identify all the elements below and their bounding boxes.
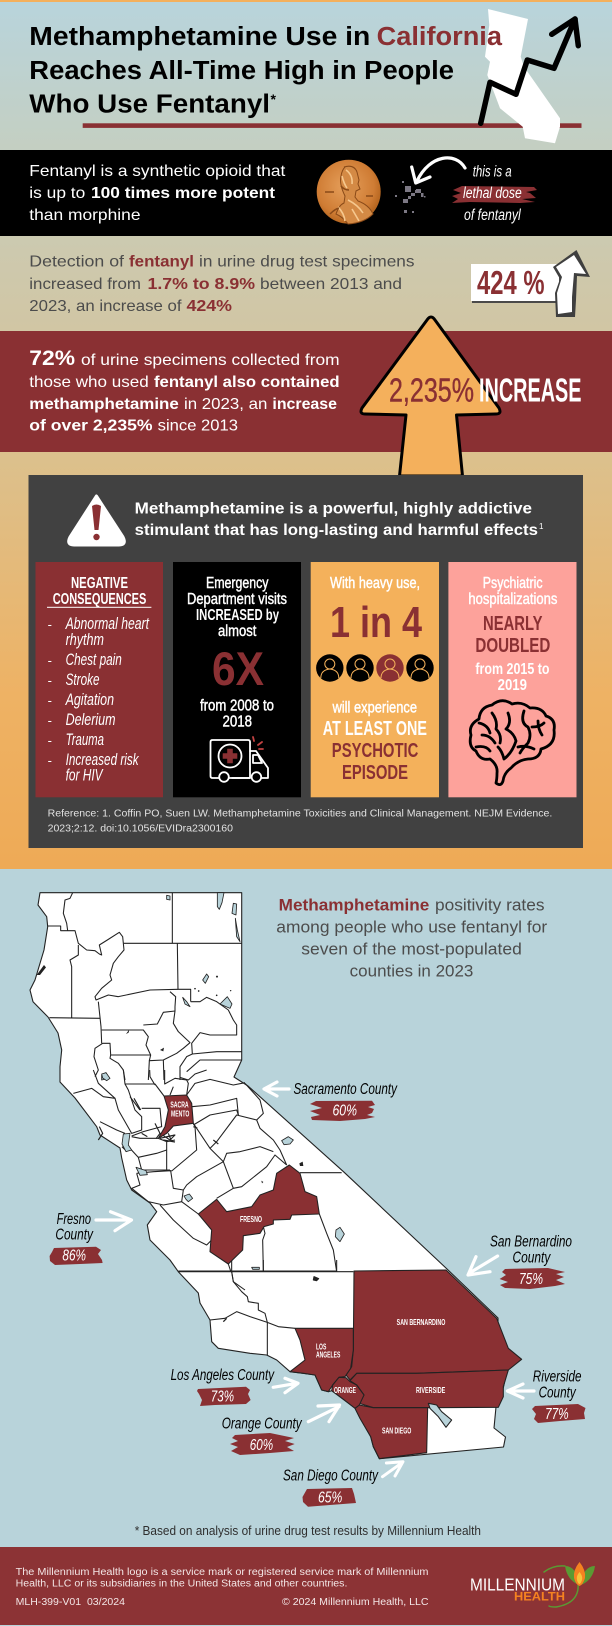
small lakes and ponds: north <box>37 965 231 1051</box>
icon row: four people, one highlighted <box>316 654 434 682</box>
map section background <box>0 869 612 1549</box>
text: co-use statistic: those who used <box>29 374 149 391</box>
card: psychotic episode <box>311 562 439 797</box>
list: consequences: for HIV <box>66 767 104 785</box>
callout: Riverside County 77%: Riverside <box>533 1369 582 1386</box>
title: Methamphetamine Use in <box>29 23 370 51</box>
icon: brain <box>470 701 554 785</box>
list: consequences: - <box>48 693 52 708</box>
callout: lethal dose label: of fentanyl <box>464 207 521 224</box>
callout: lethal dose label: lethal dose <box>463 185 522 202</box>
callout: San Diego County 65%: 65% <box>318 1490 342 1507</box>
text: fentanyl detection statistic: Detection of <box>29 254 125 271</box>
delta and bay waterways <box>98 1098 218 1150</box>
icon: penny <box>317 160 381 224</box>
footer legal text <box>16 1567 428 1608</box>
panel heading: stimulant that has long-lasting and harmful effects <box>135 522 538 539</box>
callout: Sacramento County 60%: Sacramento County <box>294 1081 398 1098</box>
callout: lethal dose label <box>452 164 537 224</box>
title <box>29 23 503 119</box>
list: consequences: - <box>48 753 52 768</box>
county: Sacramento <box>158 1095 193 1138</box>
callout: 424% badge with arrow: 424 % <box>477 264 544 301</box>
panel heading <box>135 500 544 539</box>
county labels: RIVERSIDE <box>416 1385 445 1395</box>
reference note <box>48 808 552 835</box>
list: consequences: Delerium <box>66 711 116 729</box>
text: fentanyl detection statistic: between 2013 and <box>260 276 402 293</box>
card: emergency department visits <box>173 562 301 797</box>
county labels: LOS <box>316 1342 326 1352</box>
card: psychiatric hospitalizations: from 2015 to <box>475 661 550 678</box>
panel: methamphetamine harms <box>28 475 583 848</box>
county lines: central <box>73 1070 344 1290</box>
county labels: ORANGE <box>334 1385 356 1395</box>
footer <box>0 1547 612 1625</box>
callout: Fresno County 86%: 86% <box>62 1248 86 1265</box>
card: emergency department visits: Emergency <box>206 575 269 592</box>
card: psychiatric hospitalizations: hospitalizations <box>468 591 558 608</box>
text: fentanyl detection statistic: in urine drug test specimens <box>199 254 414 271</box>
text: co-use statistic: in 2023, an <box>184 396 267 413</box>
text: co-use statistic: methamphetamine <box>29 396 179 413</box>
card: psychiatric hospitalizations: NEARLY <box>483 613 543 635</box>
icon: rising black arrow <box>481 19 578 123</box>
callout: San Bernardino County 75%: 75% <box>519 1271 543 1288</box>
county: San Diego <box>355 1405 428 1459</box>
county: Fresno: SACRA <box>170 1099 189 1109</box>
footer legal text: The Millennium Health logo is a service mark or registered service mark of Millennium <box>16 1567 428 1578</box>
card: emergency department visits: from 2008 to <box>200 698 274 715</box>
icon: warning triangle <box>69 496 124 545</box>
card: psychiatric hospitalizations: 2019 <box>498 677 527 694</box>
text: fentanyl potency statement <box>29 163 286 224</box>
callout: Sacramento County 60% <box>264 1081 398 1121</box>
county: Riverside <box>350 1370 508 1408</box>
arrow: large 2,235% increase arrow <box>361 317 582 476</box>
list: consequences: Trauma <box>66 731 104 749</box>
text: co-use statistic: of urine specimens collected from <box>81 352 340 369</box>
top accent strip <box>0 0 612 2</box>
reference note: 2023;2:12. doi:10.1056/EVIDra2300160 <box>48 823 233 835</box>
list: consequences: - <box>48 733 52 748</box>
county: Fresno: FRESNO <box>240 1214 262 1224</box>
panel heading: 1 <box>539 522 544 531</box>
text: fentanyl potency statement: 100 times more potent <box>91 185 276 202</box>
card: emergency department visits: Department visits <box>187 591 287 608</box>
callout: Riverside County 77%: 77% <box>545 1406 569 1423</box>
text: map heading: positivity rates <box>435 897 544 915</box>
list: consequences: Agitation <box>65 691 114 709</box>
callout: San Diego County 65%: San Diego County <box>283 1468 379 1485</box>
card: psychiatric hospitalizations <box>448 562 576 797</box>
callout: Fresno County 86% <box>50 1211 132 1265</box>
list: consequences: - <box>48 653 52 668</box>
county: Fresno <box>158 1095 319 1264</box>
callout: Orange County 60%: Orange County <box>222 1415 303 1432</box>
header graphic: California with rising arrow <box>83 9 581 143</box>
list: consequences: - <box>48 713 52 728</box>
list: consequences: Stroke <box>66 671 100 689</box>
card: negative consequences: CONSEQUENCES <box>53 591 147 608</box>
county: Los Angeles <box>290 1328 353 1392</box>
callout: Sacramento County 60%: 60% <box>332 1103 357 1120</box>
county: Orange <box>332 1377 364 1408</box>
footer legal text: Health, LLC or its subsidiaries in the United States and other countries. <box>16 1579 347 1590</box>
text: co-use statistic: fentanyl also contained <box>154 374 340 391</box>
callout: Riverside County 77% <box>507 1369 586 1423</box>
county lines: south <box>178 1260 353 1355</box>
text: fentanyl detection statistic <box>29 254 415 315</box>
card: psychotic episode: will experience <box>332 700 417 717</box>
icon: white California silhouette <box>485 9 560 143</box>
card: psychotic episode: With heavy use, <box>330 575 420 592</box>
county: Fresno: MENTO <box>171 1108 190 1118</box>
callout: San Diego County 65% <box>283 1462 403 1507</box>
title: Who Use Fentanyl <box>29 91 270 119</box>
panel heading: Methamphetamine is a powerful, highly addictive <box>135 500 532 517</box>
text: map heading: among people who use fentanyl for <box>276 919 548 937</box>
southern highlighted counties <box>290 1270 522 1459</box>
card: psychotic episode: PSYCHOTIC <box>332 740 418 762</box>
reference note: Reference: 1. Coffin PO, Suen LW. Methamphetamine Toxicities and Clinical Management. NEJM Evidence. <box>48 808 552 820</box>
arrow: large 2,235% increase arrow: 2,235% <box>389 372 474 409</box>
card: emergency department visits: INCREASED by <box>196 607 279 624</box>
card: negative consequences: NEGATIVE <box>71 575 128 592</box>
county labels <box>316 1317 445 1435</box>
callout: San Bernardino County 75%: San Bernardino <box>490 1234 572 1251</box>
text: fentanyl detection statistic: 424% <box>186 298 232 315</box>
card: emergency department visits: almost <box>218 623 257 640</box>
lake: Salton Sea <box>428 1403 452 1427</box>
text: co-use statistic: of over 2,235% <box>29 418 153 435</box>
title: California <box>377 23 503 51</box>
callout: 424% badge with arrow <box>471 250 590 317</box>
card: psychiatric hospitalizations: DOUBLED <box>475 635 550 657</box>
text: co-use statistic: since 2013 <box>158 418 238 435</box>
card: psychotic episode: AT LEAST ONE <box>323 718 427 740</box>
icon: lethal dose powder specks <box>395 181 426 213</box>
footer legal text: MLH-399-V01 03/2024 <box>16 1597 125 1608</box>
callout: San Bernardino County 75%: County <box>512 1250 551 1267</box>
text: map heading: seven of the most-populated <box>301 941 522 959</box>
text: co-use statistic <box>29 347 340 435</box>
text: co-use statistic: 72% <box>29 347 75 370</box>
list: consequences <box>48 615 150 785</box>
text: fentanyl detection statistic: increased from <box>29 276 141 293</box>
list: consequences: rhythm <box>66 631 104 649</box>
text: map heading: Methamphetamine <box>279 897 429 915</box>
county lines: north <box>37 893 242 1080</box>
county labels: SAN BERNARDINO <box>397 1317 445 1327</box>
small ponds: central <box>261 1162 303 1183</box>
text: fentanyl detection statistic: fentanyl <box>129 254 194 271</box>
footer legal text: © 2024 Millennium Health, LLC <box>282 1597 428 1608</box>
callout: Riverside County 77%: County <box>539 1384 577 1401</box>
county labels: ANGELES <box>316 1349 340 1359</box>
callout: Los Angeles County 73%: 73% <box>211 1389 234 1406</box>
footnote: * Based on analysis of urine drug test results by Millennium Health <box>135 1524 481 1538</box>
callout: Orange County 60% <box>222 1405 340 1455</box>
text: fentanyl potency statement: than morphine <box>29 207 141 224</box>
title: Reaches All-Time High in People <box>29 57 454 85</box>
text: fentanyl potency statement: is up to <box>29 185 85 202</box>
list: consequences: Abnormal heart <box>65 615 150 633</box>
arrow: pointing to powder <box>412 158 465 183</box>
gradient background <box>0 0 612 869</box>
county labels: SAN DIEGO <box>382 1425 411 1435</box>
list: consequences: - <box>48 673 52 688</box>
icon: ambulance <box>210 737 268 782</box>
card: psychotic episode: EPISODE <box>342 762 408 784</box>
logo: Millennium Health <box>470 1562 595 1607</box>
list: consequences: Increased risk <box>66 751 139 769</box>
card: emergency department visits: 2018 <box>222 714 252 731</box>
callout: Fresno County 86%: County <box>55 1226 94 1243</box>
text: map heading: counties in 2023 <box>350 963 473 981</box>
text: fentanyl potency statement: Fentanyl is a synthetic opioid that <box>29 163 286 180</box>
panel: fentanyl potency <box>0 150 612 236</box>
state outline <box>30 893 521 1459</box>
text: fentanyl detection statistic: 1.7% to 8.9% <box>148 276 255 293</box>
card: emergency department visits: 6X <box>212 642 264 695</box>
list: consequences: Chest pain <box>66 651 122 669</box>
text: map heading <box>276 897 548 981</box>
logo: Millennium Health: HEALTH <box>514 1590 565 1604</box>
text: fentanyl detection statistic: 2023, an increase of <box>29 298 182 315</box>
panel: methamphetamine co-use <box>0 331 612 452</box>
logo: Millennium Health: MILLENNIUM <box>470 1575 565 1595</box>
callout: Los Angeles County 73% <box>171 1367 298 1406</box>
title underline <box>83 123 581 128</box>
map: California counties <box>30 893 522 1459</box>
callout: Orange County 60%: 60% <box>250 1437 273 1454</box>
card: psychotic episode: 1 in 4 <box>330 598 422 647</box>
card: psychiatric hospitalizations: Psychiatric <box>483 575 543 592</box>
card: negative consequences <box>36 562 163 797</box>
callout: San Bernardino County 75% <box>468 1234 572 1289</box>
county: San Bernardino <box>346 1270 522 1380</box>
text: co-use statistic: increase <box>272 396 337 413</box>
list: consequences: - <box>48 617 52 632</box>
lakes: north <box>102 893 240 1080</box>
callout: Fresno County 86%: Fresno <box>57 1211 91 1228</box>
callout: lethal dose label: this is a <box>473 164 512 181</box>
lakes: central <box>102 1073 344 1269</box>
callout: Los Angeles County 73%: Los Angeles County <box>171 1367 275 1384</box>
title: * <box>270 91 276 107</box>
